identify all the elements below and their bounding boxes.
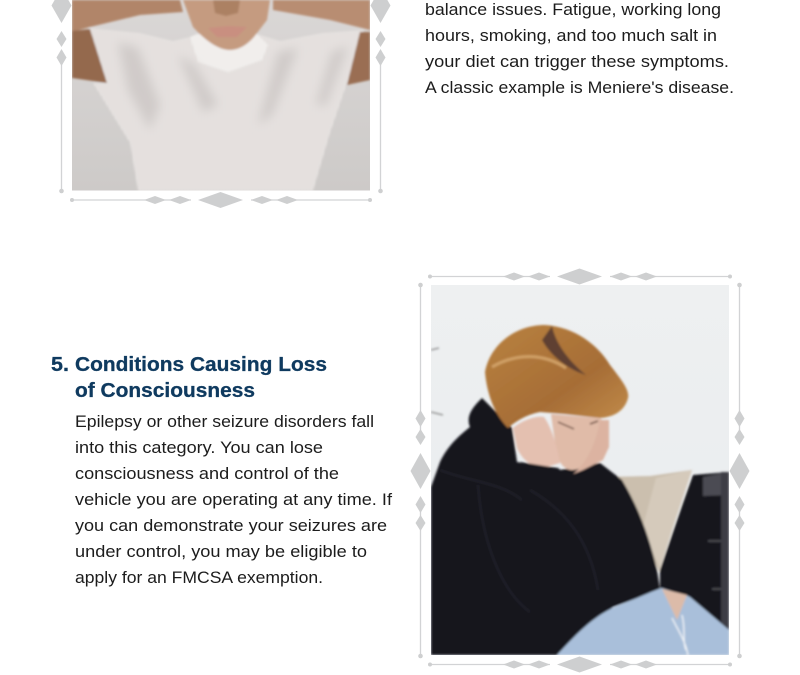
text block: item 5 description: under control, you may be eligible to [75,542,367,561]
text block: symptoms continued: your diet can trigger these symptoms. [425,52,729,71]
text block: item 5 description: vehicle you are operating at any time. If [75,490,392,509]
text block: item 5 description: consciousness and control of the [75,464,339,483]
hoodie [431,398,660,655]
right arm [273,0,370,30]
sleeve cuffs [520,460,561,472]
photo: woman in black hoodie holding her head [431,285,729,655]
hair [485,325,628,428]
text block: item 5 description: into this category. You can lose [75,438,323,457]
heading: item 5: Conditions Causing Loss [75,353,327,376]
text block: symptoms continued: balance issues. Fatigue, working long [425,0,721,19]
ornate frame: second photo [410,268,750,672]
heading: item 5 [51,353,327,402]
text block: symptoms continued [425,0,734,97]
chair [660,472,729,630]
ornate frame: first photo [52,0,390,208]
shirt [88,28,363,191]
heading: item 5: of Consciousness [75,379,255,402]
right hand [573,420,609,474]
chin and neck [183,0,270,50]
text block: symptoms continued: A classic example is Meniere's disease. [425,78,734,97]
plant [431,348,443,415]
face [551,414,606,470]
heading: item 5: 5. [51,353,69,376]
text block: item 5 description [75,412,392,587]
jeans [557,588,729,655]
blanket [616,470,688,574]
photo: woman in white shirt holding her ears [72,0,370,191]
text block: item 5 description: Epilepsy or other seizure disorders fall [75,412,374,431]
left arm [72,0,183,32]
left hand [513,417,560,468]
text block: item 5 description: apply for an FMCSA exemption. [75,568,323,587]
text block: item 5 description: you can demonstrate your seizures are [75,516,387,535]
text block: symptoms continued: hours, smoking, and too much salt in [425,26,717,45]
